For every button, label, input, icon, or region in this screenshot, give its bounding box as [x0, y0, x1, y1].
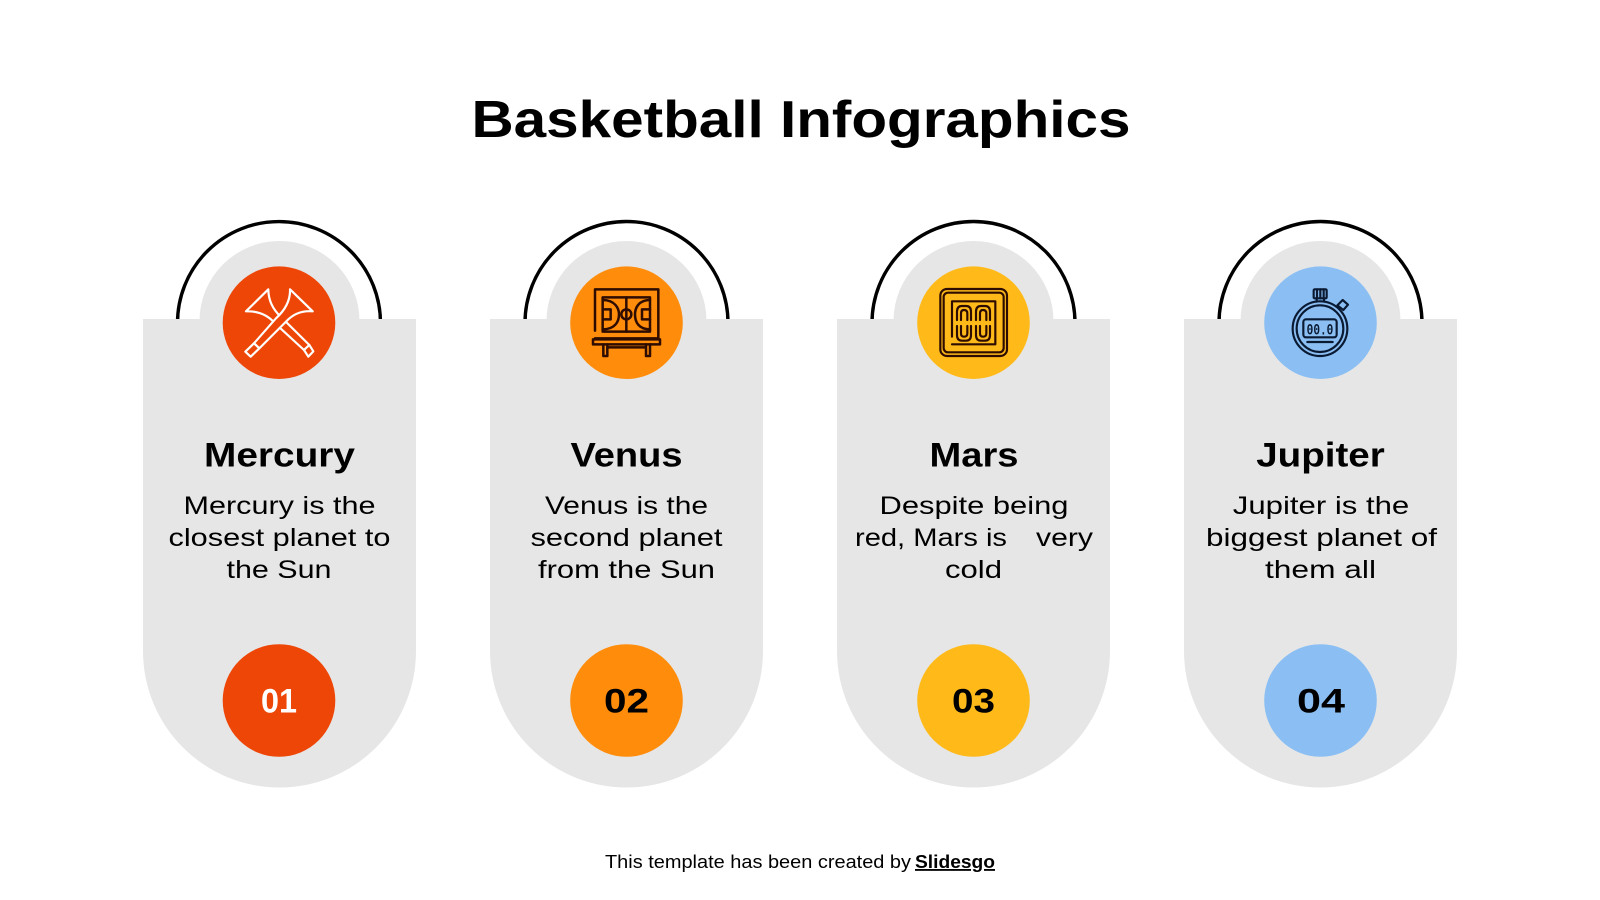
description: Venus is the — [545, 492, 708, 520]
number badge — [1264, 644, 1377, 757]
number badge — [917, 644, 1030, 757]
icon disc — [1264, 266, 1377, 379]
icon: stopwatch — [1293, 289, 1348, 356]
description: second planet — [530, 524, 723, 552]
title: Basketball Infographics — [472, 91, 1130, 149]
description: Jupiter is the — [1233, 492, 1409, 520]
number badge: 03 — [952, 682, 995, 720]
number badge: 01 — [261, 682, 297, 720]
black arc — [1219, 222, 1422, 323]
description: Despite being — [880, 492, 1068, 520]
number badge — [570, 644, 683, 757]
icon: crossed trumpets — [245, 289, 313, 357]
grey card — [490, 241, 763, 788]
heading: Jupiter — [1256, 436, 1385, 474]
panel: Mercury — [143, 222, 416, 788]
black arc — [525, 222, 728, 323]
description: the Sun — [226, 556, 332, 584]
description: red, Mars is — [855, 524, 1007, 552]
footer credit: This template has been created by — [605, 851, 912, 872]
description: cold — [945, 556, 1002, 584]
description — [855, 492, 1094, 584]
description — [168, 492, 390, 584]
description: from the Sun — [538, 556, 715, 584]
panel: Jupiter — [1184, 222, 1457, 788]
icon disc — [223, 266, 335, 379]
grey card — [837, 241, 1110, 788]
black arc — [178, 222, 380, 323]
number badge — [223, 644, 335, 757]
description: closest planet to — [168, 524, 390, 552]
grey card — [1184, 241, 1457, 788]
heading: Venus — [570, 436, 682, 474]
description — [1206, 492, 1437, 584]
black arc — [872, 222, 1075, 323]
grey card — [143, 241, 416, 788]
number badge: 04 — [1297, 682, 1345, 720]
icon: stopwatch: 00.0 — [1307, 321, 1333, 339]
icon disc — [570, 266, 683, 379]
icon: court board — [593, 289, 660, 356]
panel: Mars — [837, 222, 1110, 788]
heading: Mercury — [204, 436, 355, 474]
heading: Mars — [930, 436, 1018, 474]
footer credit: Slidesgo — [915, 851, 995, 872]
description: biggest planet of — [1206, 524, 1437, 552]
description: Mercury is the — [184, 492, 376, 520]
number badge: 02 — [604, 682, 649, 720]
description — [530, 492, 723, 584]
icon disc — [917, 266, 1030, 379]
panel: Venus — [490, 222, 763, 788]
description: them all — [1265, 556, 1376, 584]
description: very — [1036, 524, 1094, 552]
icon: scoreboard — [940, 289, 1007, 356]
